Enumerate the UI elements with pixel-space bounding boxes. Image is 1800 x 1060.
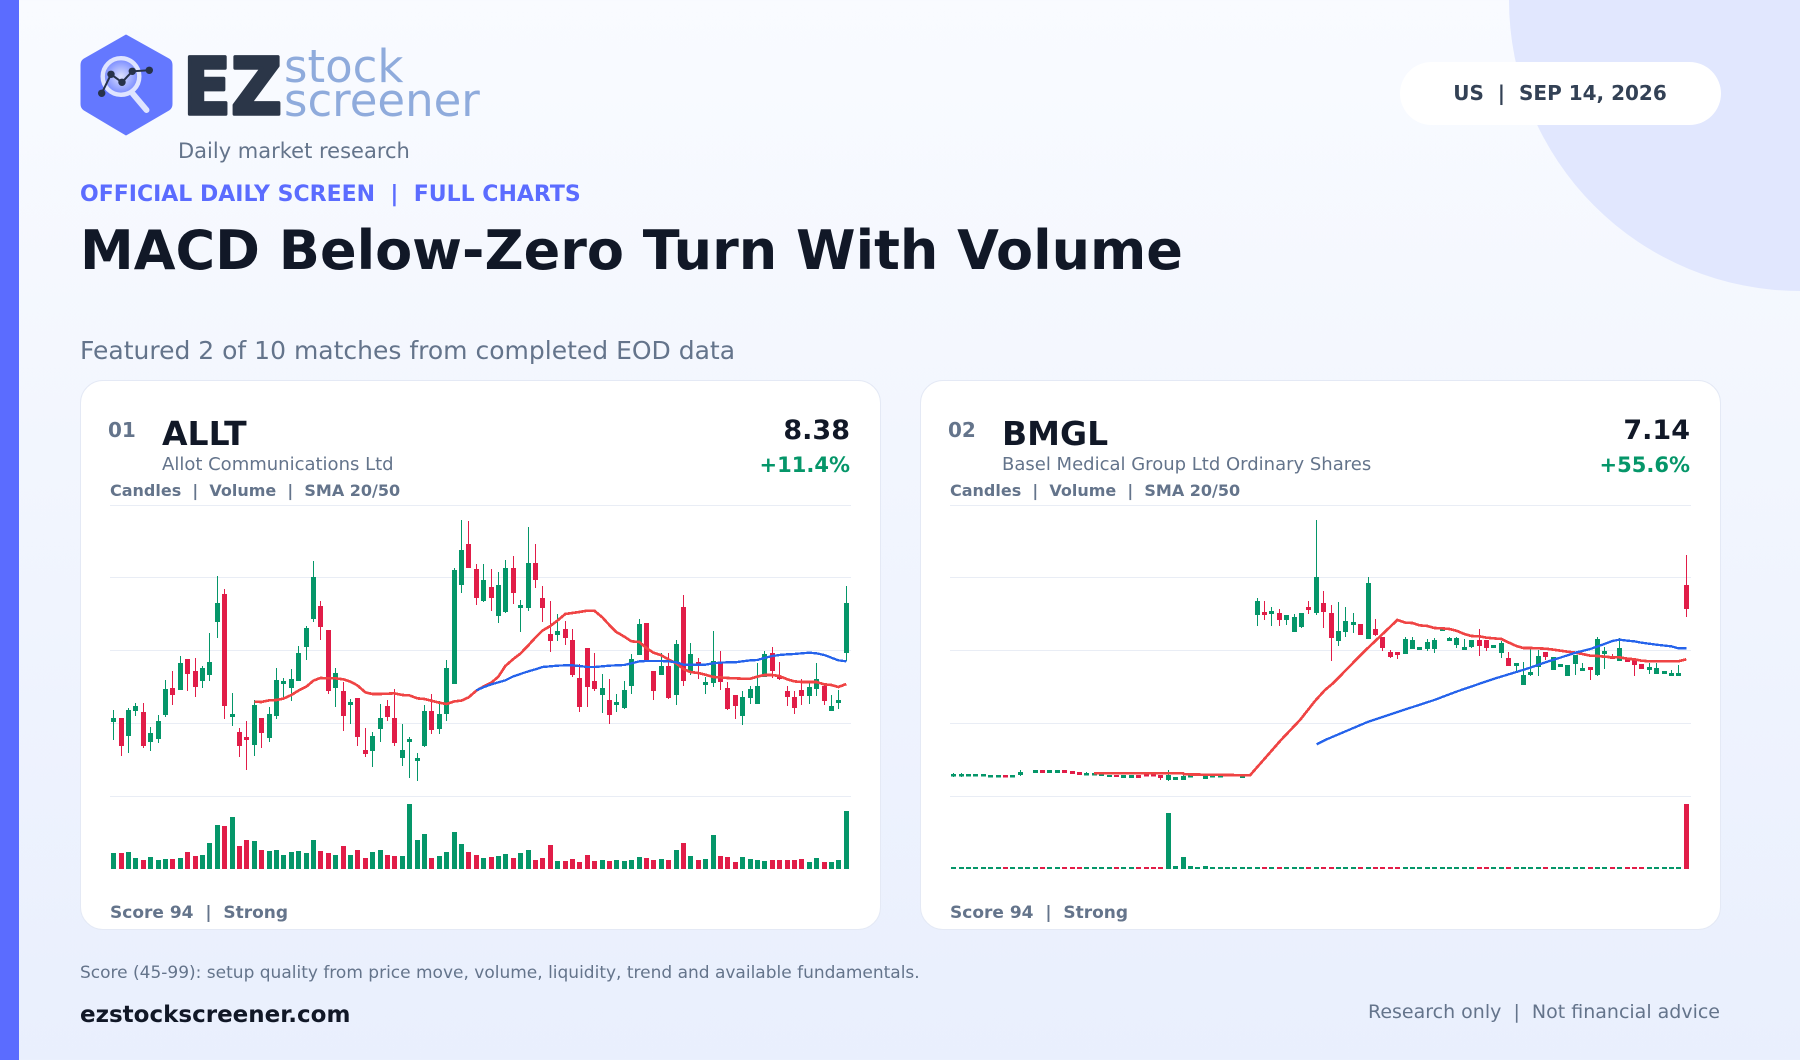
ticker: ALLT [162, 414, 247, 453]
chart legend: Candles | Volume | SMA 20/50 [110, 481, 400, 500]
price: 8.38 [783, 415, 850, 446]
kicker: OFFICIAL DAILY SCREEN | FULL CHARTS [80, 182, 581, 207]
red candles [122, 521, 824, 770]
left accent bar [0, 0, 19, 1060]
date pill [1400, 62, 1721, 125]
volume bars [954, 804, 1686, 869]
logo [80, 34, 480, 136]
wordmark stock: stock [284, 40, 403, 93]
change: +11.4% [760, 453, 850, 477]
price: 7.14 [1623, 415, 1690, 446]
change: +55.6% [1600, 453, 1690, 477]
green candles [954, 520, 1678, 781]
panel: BMGL [920, 380, 1721, 930]
rank: 01 [108, 418, 136, 442]
rank: 02 [948, 418, 976, 442]
score: Score 94 | Strong [110, 903, 288, 923]
company name: Allot Communications Ltd [162, 454, 394, 475]
title: MACD Below-Zero Turn With Volume [80, 219, 1183, 282]
company name: Basel Medical Group Ltd Ordinary Shares [1002, 454, 1371, 475]
panel: ALLT [80, 380, 881, 930]
green candles [114, 520, 846, 781]
candlestick and volume chart [110, 505, 851, 869]
disclaimer: Research only | Not financial advice [1368, 1001, 1720, 1023]
SMA 50 line [476, 653, 846, 690]
red candles [1006, 555, 1686, 780]
wordmark screener: screener [284, 74, 480, 127]
decorative corner circle [1509, 0, 1800, 291]
chart legend: Candles | Volume | SMA 20/50 [950, 481, 1240, 500]
score: Score 94 | Strong [950, 903, 1128, 923]
subtitle: Featured 2 of 10 matches from completed EOD data [80, 336, 735, 365]
icon: hexagon magnifier with chart line [81, 35, 172, 135]
SMA 50 line [1317, 640, 1686, 744]
website: ezstockscreener.com [80, 1002, 350, 1028]
score footnote: Score (45-99): setup quality from price move, volume, liquidity, trend and available fundamentals. [80, 963, 920, 983]
SMA 20 line [254, 611, 846, 704]
tagline: Daily market research [178, 139, 410, 163]
SMA 20 line [1094, 620, 1686, 775]
date pill: US | SEP 14, 2026 [1453, 81, 1667, 105]
candlestick and volume chart [950, 505, 1691, 869]
wordmark EZ: EZ [183, 43, 282, 133]
ticker: BMGL [1002, 414, 1108, 453]
volume bars [114, 804, 846, 869]
